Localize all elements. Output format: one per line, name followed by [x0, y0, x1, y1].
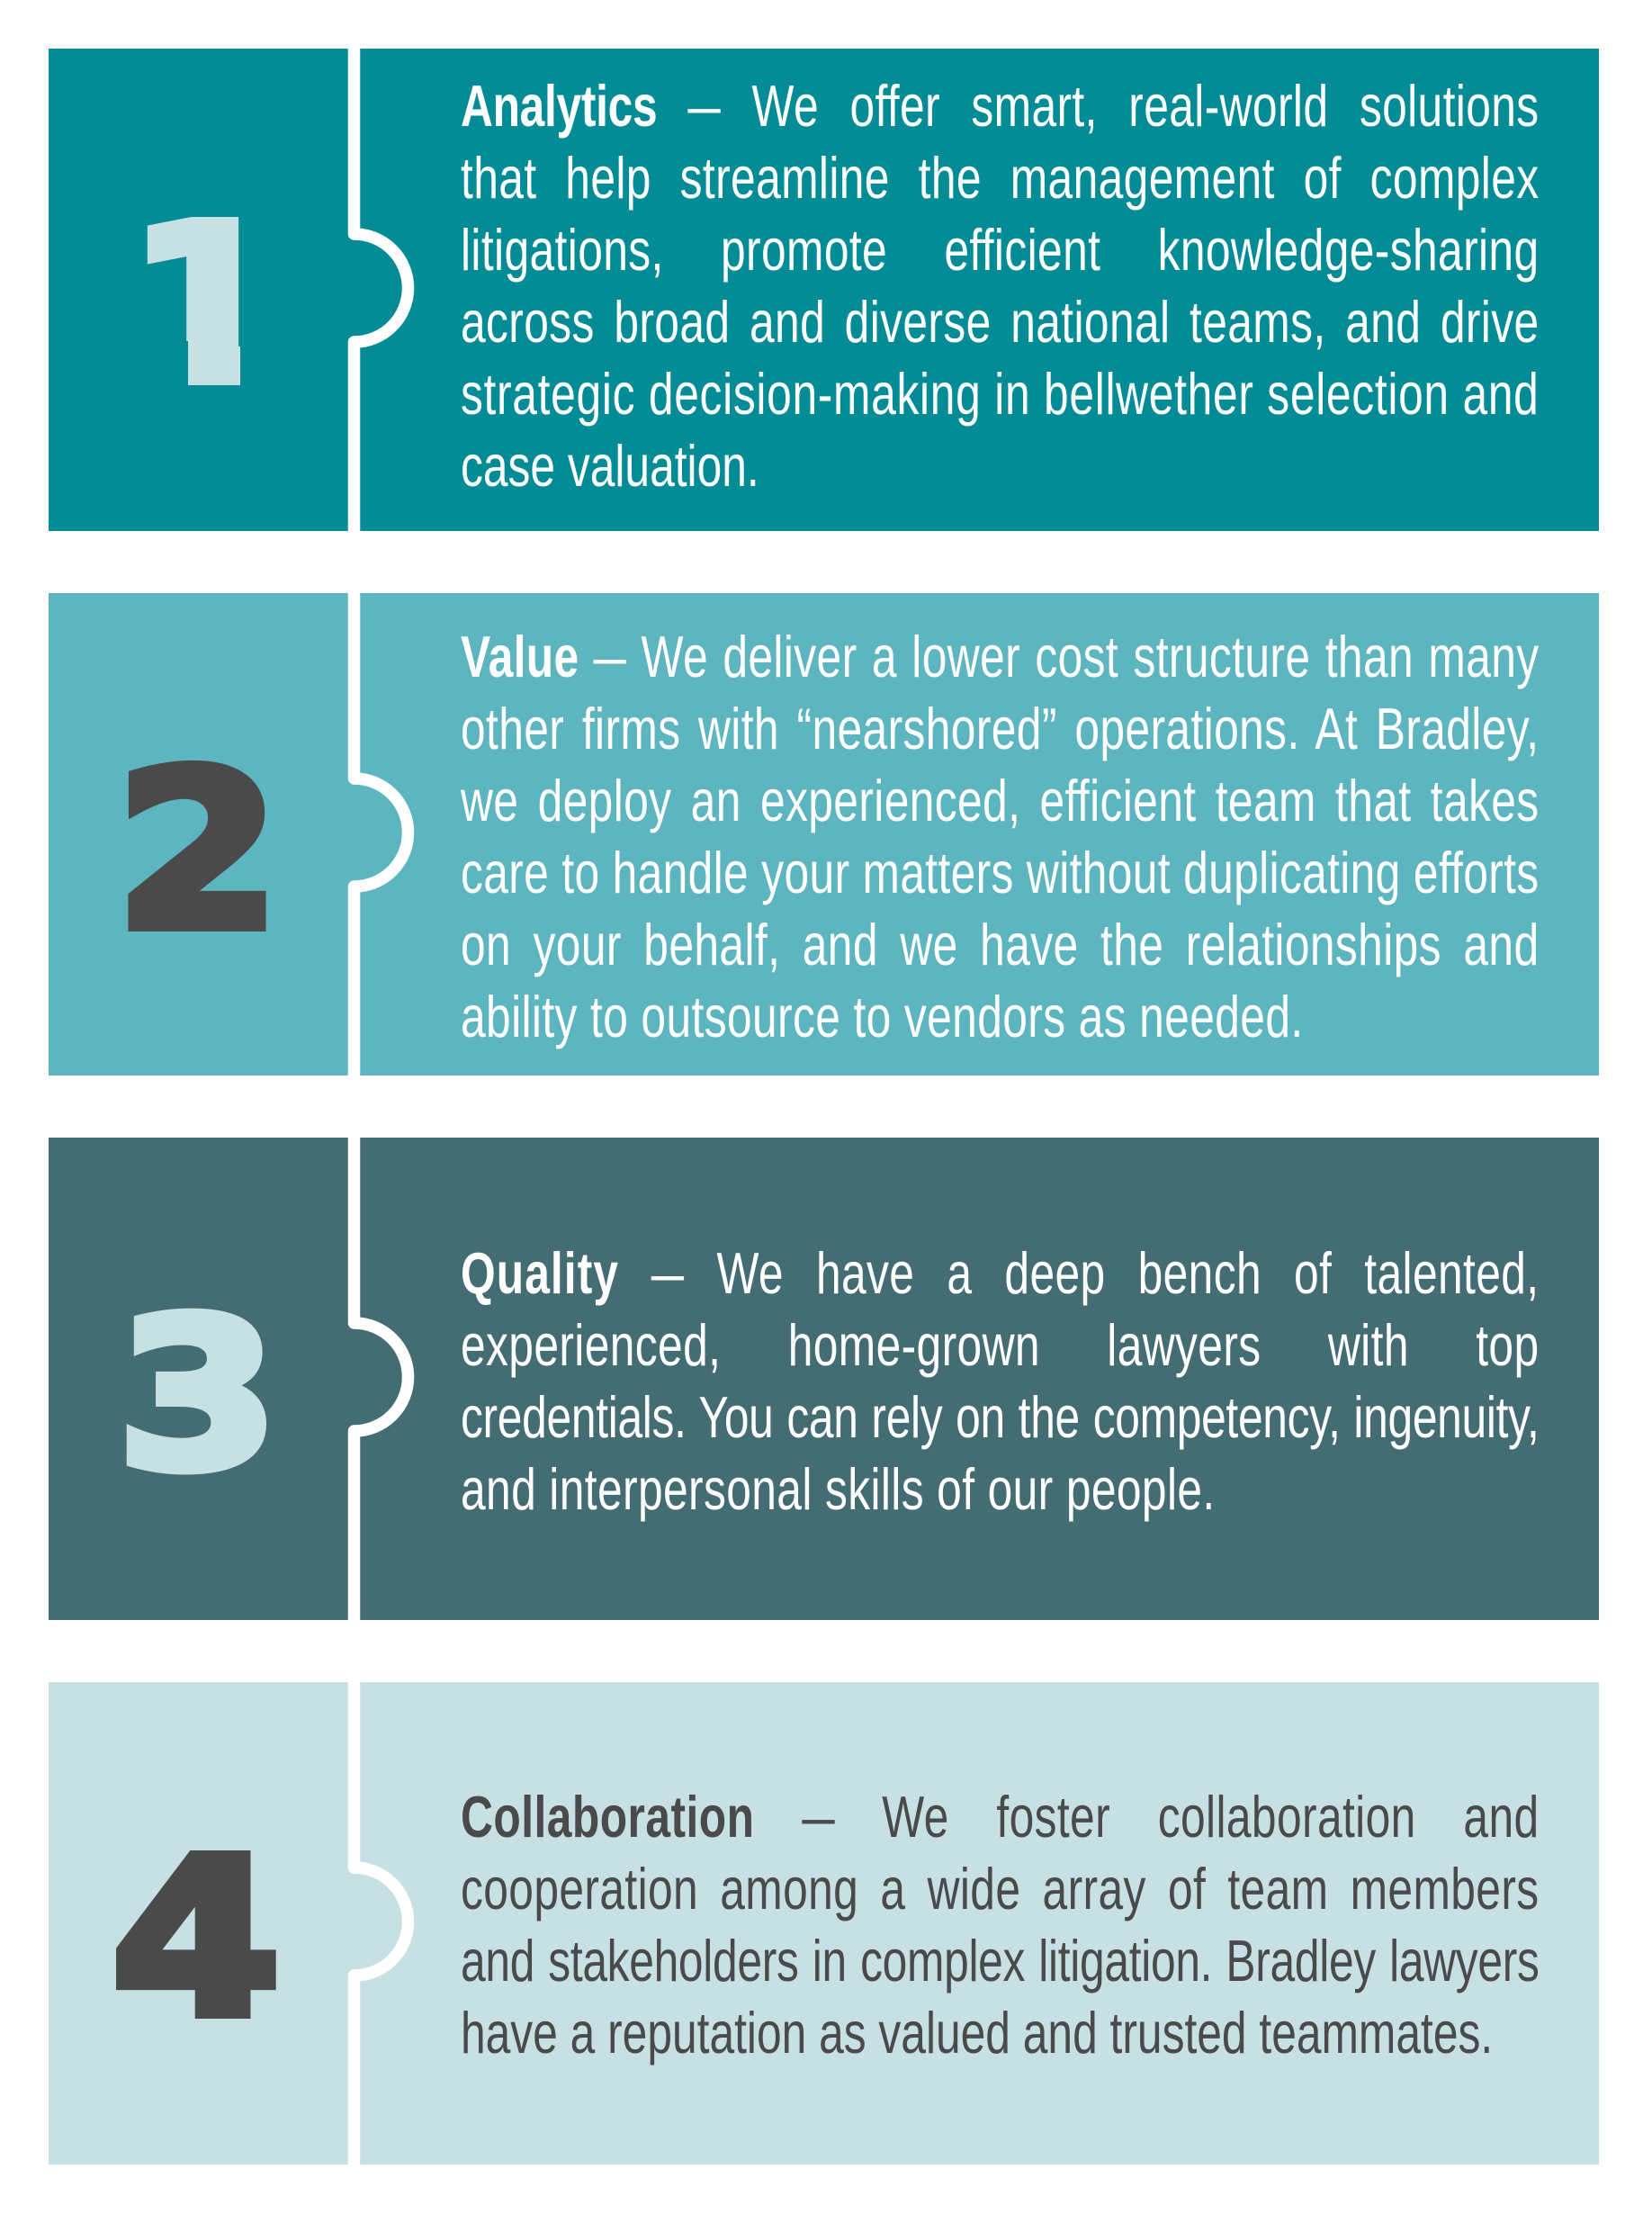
panel: value [49, 593, 1599, 1076]
text: analytics: — [687, 73, 721, 139]
text: value: on your behalf, and we have the relationships and [461, 912, 1539, 977]
text: value: ability to outsource to vendors as needed. [461, 984, 1303, 1049]
text: analytics: that help streamline the management of complex [461, 145, 1539, 211]
text: collaboration: — [802, 1784, 834, 1850]
text: value: Value We deliver a lower cost structure than many [461, 624, 1539, 689]
text: analytics: Analytics We offer smart, real-world solutions [461, 73, 1539, 139]
text: value: — [593, 624, 626, 689]
text: analytics: strategic decision-making in bellwether selection and [461, 361, 1539, 427]
text: collaboration [461, 1784, 1539, 2066]
text: quality: credentials. You can rely on the competency, ingenuity, [461, 1384, 1539, 1450]
text: collaboration: cooperation among a wide array of team members [461, 1856, 1539, 1922]
number 1: 1 [127, 180, 287, 431]
text: analytics [461, 73, 1539, 499]
text: value: other firms with “nearshored” operations. At Bradley, [461, 696, 1539, 761]
text: quality: Quality We have a deep bench of talented, [461, 1240, 1539, 1306]
number 4: 4 [112, 1814, 281, 2065]
text: value: we deploy an experienced, efficient team that takes [461, 768, 1539, 833]
text: value: care to handle your matters without duplicating efforts [461, 840, 1539, 905]
text: quality [461, 1240, 1539, 1522]
text: analytics: case valuation. [461, 433, 759, 499]
text: quality: and interpersonal skills of our people. [461, 1456, 1215, 1522]
text: analytics: litigations, promote efficient knowledge-sharing [461, 217, 1539, 283]
number 2: 2 [115, 726, 281, 977]
text: collaboration: Collaboration We foster collaboration and [461, 1784, 1539, 1850]
panel: analytics [49, 49, 1599, 531]
text: value [461, 624, 1539, 1049]
panel: quality [49, 1138, 1599, 1620]
text: quality: experienced, home-grown lawyers with top [461, 1312, 1539, 1378]
number 3: 3 [117, 1275, 279, 1516]
text: collaboration: and stakeholders in complex litigation. Bradley lawyers [461, 1928, 1539, 1994]
text: quality: — [651, 1240, 684, 1306]
text: analytics: across broad and diverse national teams, and drive [461, 289, 1539, 355]
panel: collaboration [49, 1682, 1599, 2164]
text: collaboration: have a reputation as valued and trusted teammates. [461, 2000, 1493, 2066]
